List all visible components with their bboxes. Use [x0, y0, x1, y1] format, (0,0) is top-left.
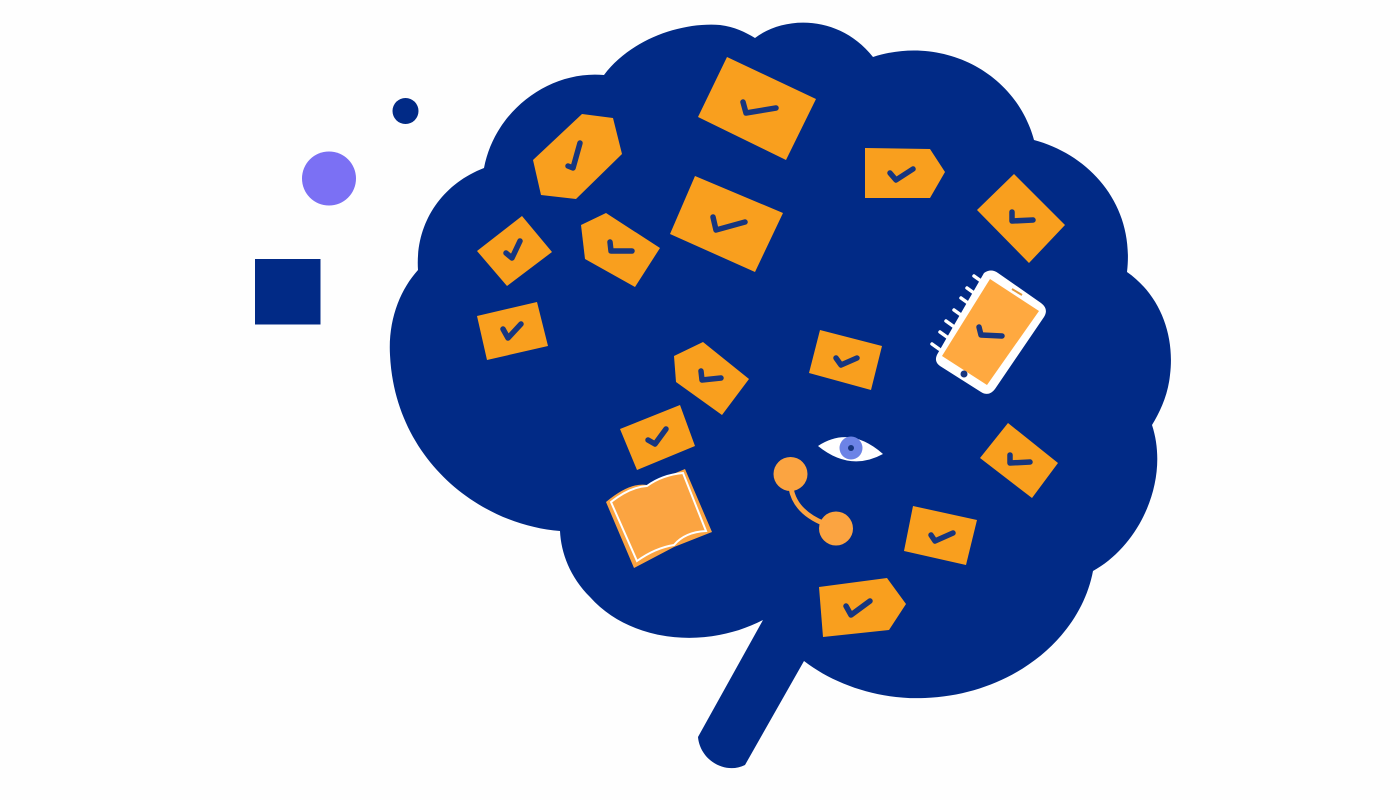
tablet screen [942, 279, 1039, 385]
note: large top [698, 57, 816, 160]
note: pentagon top left [533, 114, 622, 199]
tablet body [936, 270, 1046, 394]
note: right [980, 423, 1058, 498]
note: diamond right [977, 174, 1065, 263]
decorative small navy circle [392, 98, 418, 124]
tablet icon [932, 270, 1046, 394]
open book icon [606, 469, 712, 568]
note: pentagon middle [674, 342, 749, 415]
eye icon [818, 436, 883, 461]
note: large centre [670, 176, 783, 272]
brain silhouette [390, 23, 1171, 768]
tablet binding rings [932, 276, 981, 349]
note: middle right [809, 330, 882, 390]
note: above book [620, 405, 695, 470]
note: lower right [904, 506, 977, 565]
book white outline [611, 473, 706, 561]
tablet speaker and button [960, 289, 1022, 378]
decorative purple circle [302, 152, 356, 206]
note: small lower left [477, 302, 548, 360]
note: tag top right [865, 148, 945, 198]
connected nodes icon [774, 457, 853, 546]
tablet check mark [979, 327, 1002, 336]
note: pentagon centre left [581, 213, 660, 287]
book cover [606, 469, 712, 568]
note: tag bottom [819, 578, 906, 637]
note: small left [477, 216, 552, 286]
decorative navy square [255, 259, 320, 324]
